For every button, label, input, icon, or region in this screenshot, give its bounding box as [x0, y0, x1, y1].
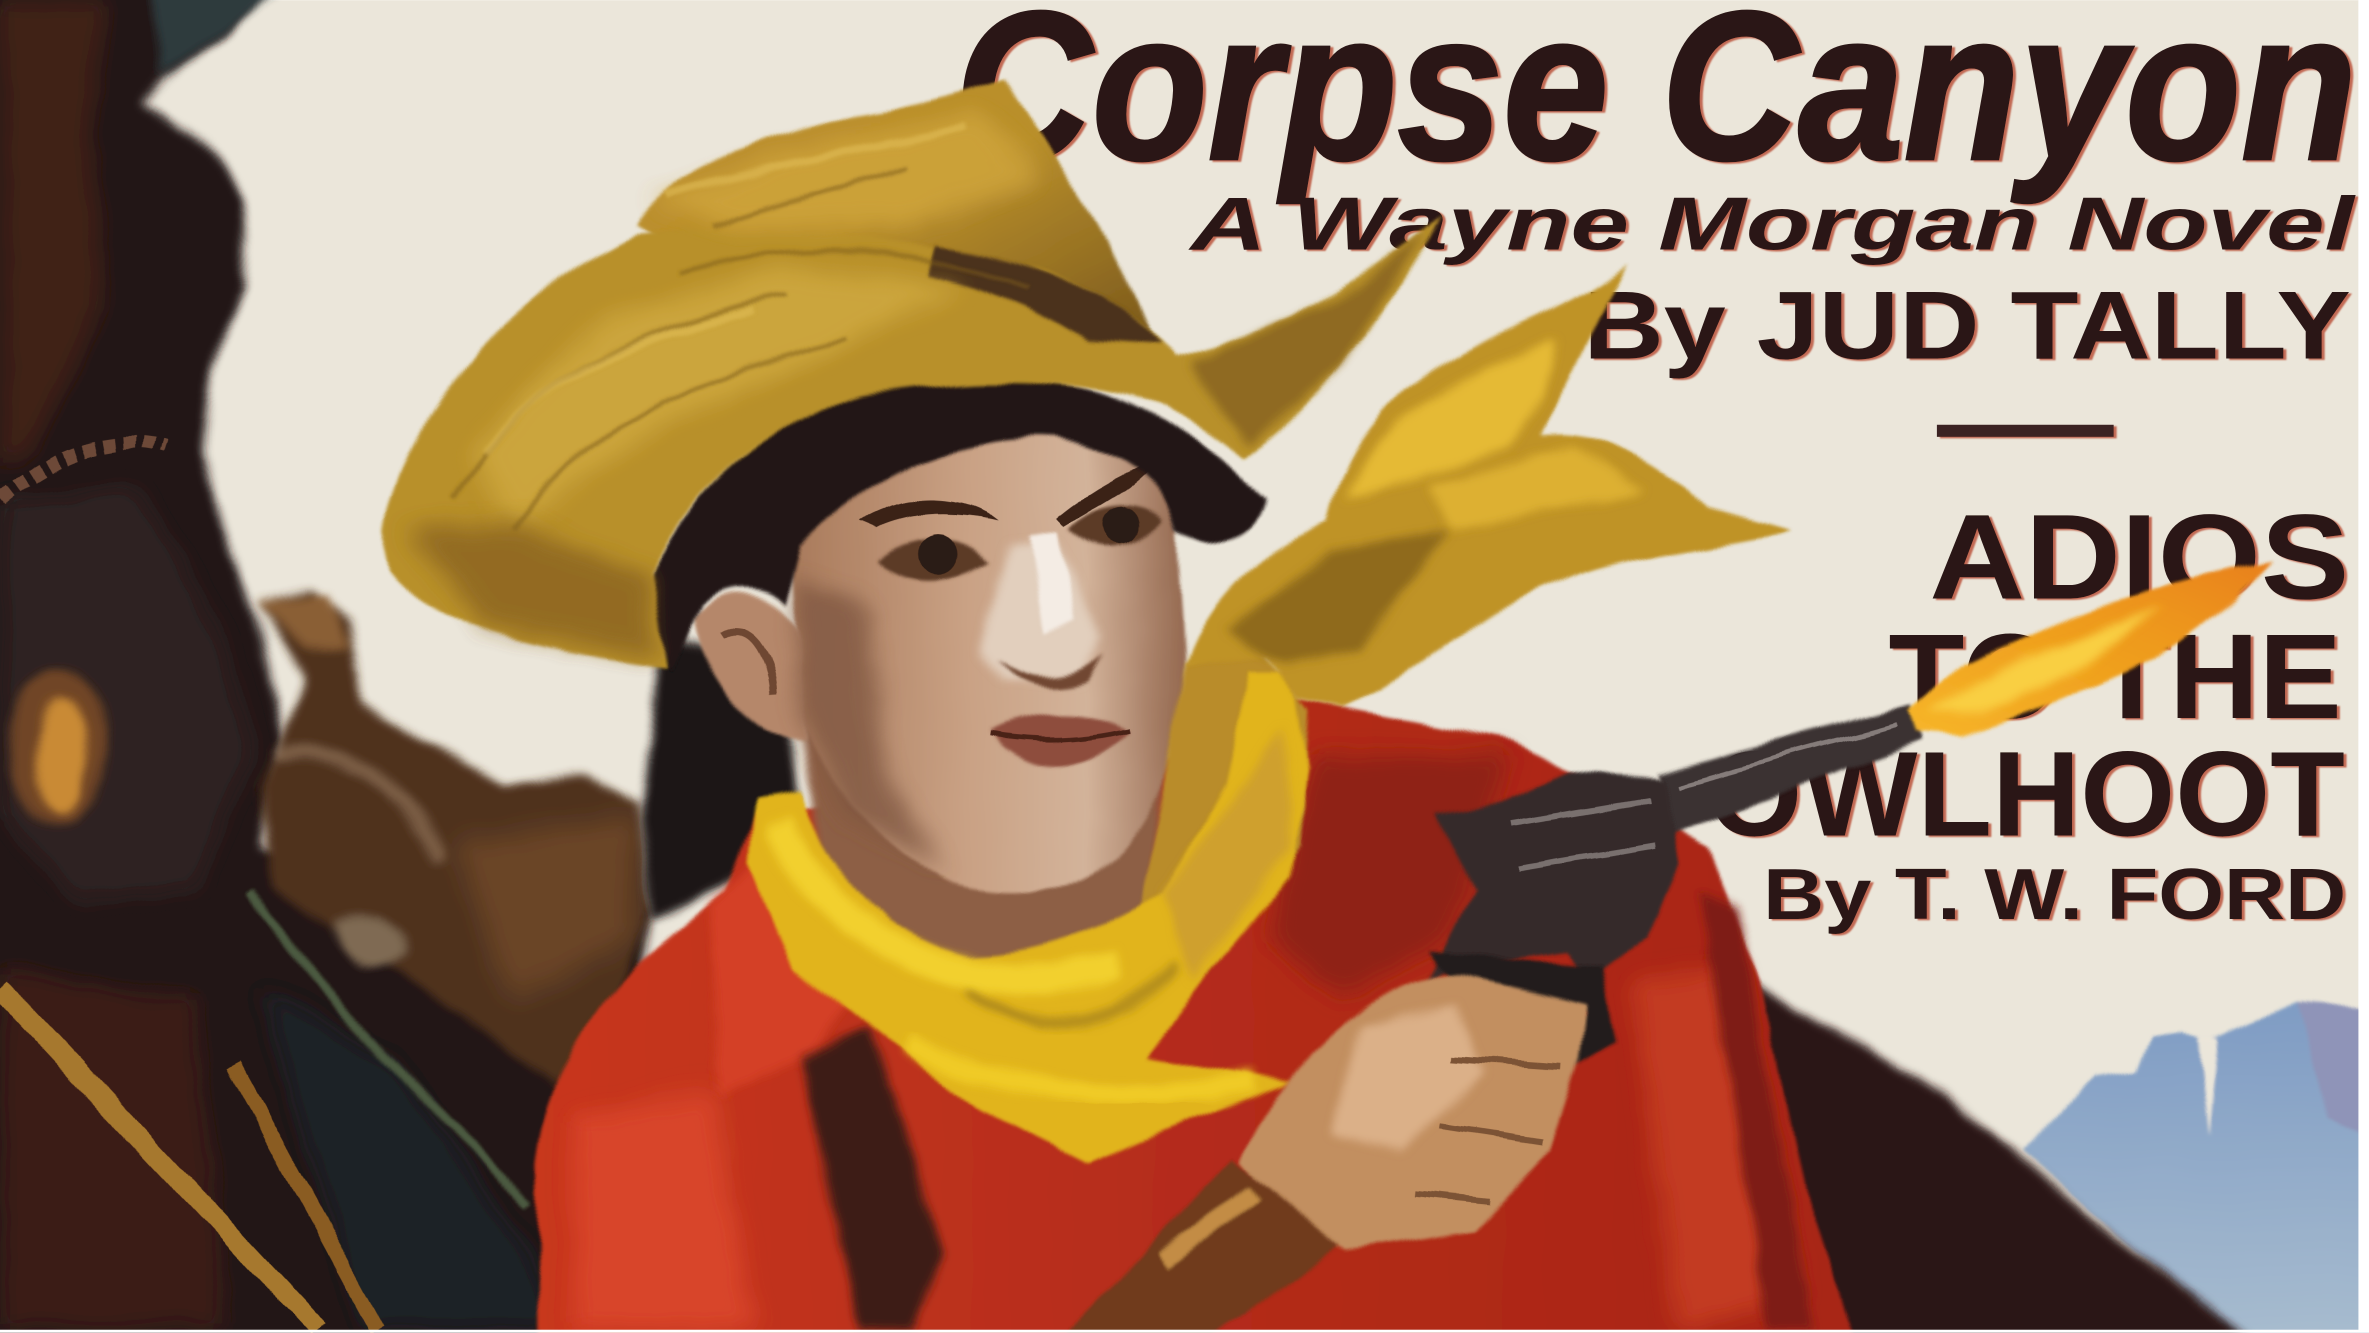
headline: Adios: ADIOS: [1929, 490, 2349, 625]
cowboy hat: [384, 79, 1443, 668]
horse: dark flank at right: [1753, 982, 2259, 1333]
sky and mesa: [2025, 1003, 2369, 1333]
byline: By Jud Tally: By JUD TALLY: [1583, 271, 2351, 379]
gold bandana tails: [1184, 263, 1792, 707]
left eye and brow: [858, 500, 997, 529]
rifle stock: [1058, 1161, 1337, 1333]
muzzle flash: [1908, 559, 2274, 736]
hat brush strokes: [453, 166, 1027, 529]
right eye and brow: [1058, 460, 1156, 526]
hat band: [929, 245, 1163, 345]
cover lettering: [955, 0, 2357, 935]
subtitle: A Wayne Morgan Novel: A Wayne Morgan Novel: [1188, 183, 2357, 267]
headline: Owlhoot: OWLHOOT: [1707, 727, 2345, 862]
horse eye: [9, 668, 106, 825]
yellow scarf: [748, 642, 1308, 1164]
reins: [0, 990, 317, 1330]
nose: [982, 544, 1100, 680]
ear: [695, 593, 808, 741]
revolver: [1428, 704, 1922, 1073]
red shirt: [536, 698, 1855, 1333]
saddle: [257, 589, 653, 1088]
face shadow: [793, 574, 944, 869]
horse: dark head at left: [0, 0, 653, 1333]
mouth: [990, 714, 1130, 767]
hair at back of neck: [641, 635, 801, 922]
neck and face: [695, 416, 1185, 982]
hair under the hat: [642, 374, 1266, 673]
divider bar: [1937, 425, 2114, 437]
bridle strap: [0, 443, 166, 499]
byline: By T. W. Ford: By T. W. FORD: [1763, 854, 2346, 935]
headline: To The: TO THE: [1889, 609, 2342, 744]
hand gripping revolver: [1239, 975, 1586, 1251]
hat highlights: [650, 114, 1042, 227]
